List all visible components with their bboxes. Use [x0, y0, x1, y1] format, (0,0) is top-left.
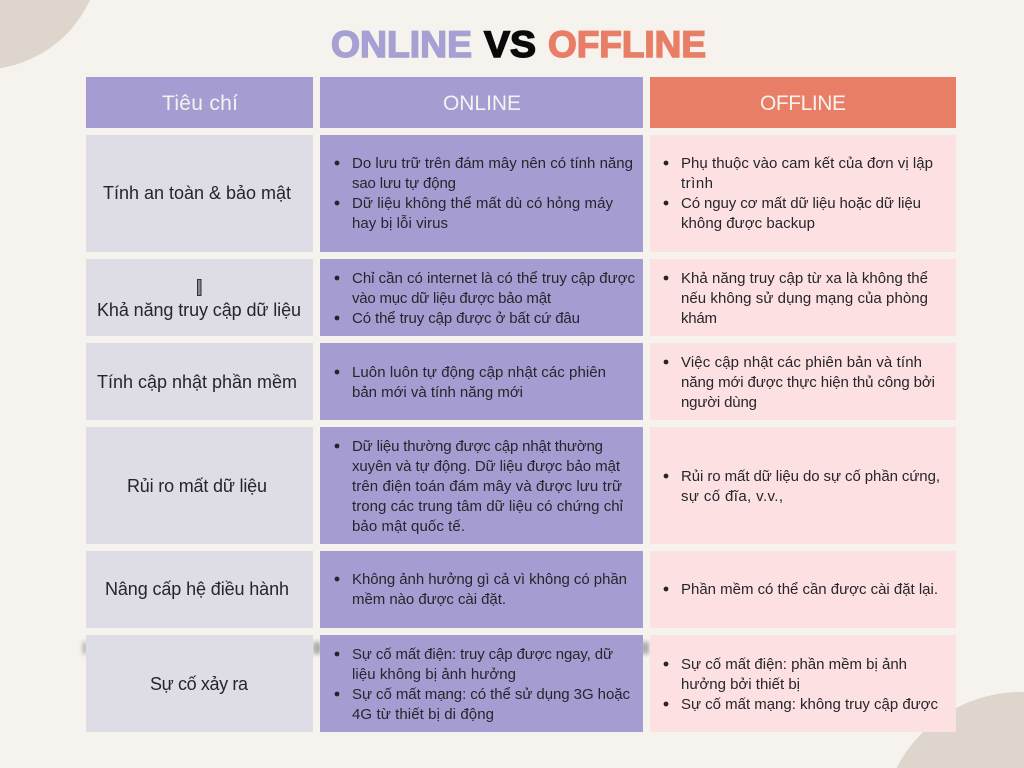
online: sự cố — [320, 635, 643, 732]
offline: nâng cấp: Phần mềm có thể cần được cài đặt lại. — [681, 581, 938, 598]
offline: sự cố: Sự cố mất điện: phần mềm bị ảnh — [681, 656, 907, 673]
offline: an toàn: Có nguy cơ mất dữ liệu hoặc dữ liệu — [681, 195, 921, 212]
criterion: Tính an toàn & bảo mật: Tính an toàn & bảo mật — [103, 183, 291, 203]
criterion: Nâng cấp hệ điều hành — [86, 551, 313, 628]
online: truy cập: vào mục dữ liệu được bảo mật — [352, 290, 552, 307]
criterion: Tính cập nhật phần mềm: Tính cập nhật phần mềm — [97, 372, 297, 392]
online: nâng cấp: Không ảnh hưởng gì cả vì không có phần — [352, 571, 627, 588]
online: rủi ro: trong các trung tâm dữ liệu có chứng chỉ — [352, 498, 624, 515]
title — [331, 24, 706, 65]
offline: sự cố: Sự cố mất mạng: không truy cập được — [681, 696, 938, 713]
offline: truy cập: nếu không sử dụng mạng của phòng — [681, 290, 928, 307]
online: an toàn — [320, 135, 643, 252]
offline: an toàn: Phụ thuộc vào cam kết của đơn vị lập — [681, 155, 933, 172]
criterion: Rủi ro mất dữ liệu — [86, 427, 313, 544]
blurred smudges — [83, 642, 649, 654]
online: rủi ro: xuyên và tự động. Dữ liệu được bảo mật — [352, 458, 621, 475]
offline: nâng cấp — [650, 551, 956, 628]
criterion: Tính cập nhật phần mềm — [86, 343, 313, 420]
online: cập nhật — [320, 343, 643, 420]
offline: cập nhật: năng mới được thực hiện thủ công bởi — [681, 374, 935, 391]
header: Tiêu chí: Tiêu chí — [162, 92, 238, 115]
online: sự cố: Sự cố mất điện: truy cập được ngay, dữ — [352, 646, 613, 663]
offline: rủi ro — [650, 427, 956, 544]
header: ONLINE: ONLINE — [443, 92, 521, 115]
offline: an toàn — [650, 135, 956, 252]
offline: truy cập: Khả năng truy cập từ xa là không thể — [681, 270, 928, 287]
offline: truy cập: khám — [681, 310, 717, 327]
online: an toàn: Dữ liệu không thể mất dù có hỏng máy — [352, 195, 614, 212]
header: ONLINE — [320, 77, 643, 128]
offline: cập nhật — [650, 343, 956, 420]
header: OFFLINE — [650, 77, 956, 128]
offline: rủi ro: Rủi ro mất dữ liệu do sự cố phần cứng, — [681, 468, 940, 485]
online: rủi ro — [320, 427, 643, 544]
offline: an toàn: trình — [681, 175, 713, 192]
online: rủi ro: Dữ liệu thường được cập nhật thường — [352, 438, 603, 455]
criterion: Tính an toàn & bảo mật — [86, 135, 313, 252]
online: sự cố: Sự cố mất mạng: có thể sử dụng 3G hoặc — [352, 686, 630, 703]
online: nâng cấp: mềm nào được cài đặt. — [352, 591, 506, 608]
offline: sự cố — [650, 635, 956, 732]
title: ONLINE — [331, 24, 472, 65]
online: cập nhật: Luôn luôn tự động cập nhật các phiên — [352, 364, 606, 381]
decorative circle: bottom right — [896, 692, 1024, 768]
criterion: Nâng cấp hệ điều hành: Nâng cấp hệ điều hành — [105, 579, 289, 599]
criterion: Khả năng truy cập dữ liệu: Khả năng truy cập dữ liệu — [97, 300, 301, 320]
offline: truy cập — [650, 259, 956, 336]
offline: sự cố: hưởng bởi thiết bị — [681, 676, 800, 693]
decorative circle: top left — [0, 0, 90, 68]
online: cập nhật: bản mới và tính năng mới — [352, 384, 523, 401]
online: truy cập: Chỉ cần có internet là có thể truy cập được — [352, 270, 636, 287]
offline: cập nhật: Việc cập nhật các phiên bản và tính — [681, 354, 922, 371]
header: Tiêu chí — [86, 77, 313, 128]
header: OFFLINE: OFFLINE — [760, 92, 846, 115]
online: an toàn: hay bị lỗi virus — [352, 215, 448, 232]
online: sự cố: 4G từ thiết bị di động — [352, 706, 494, 723]
offline: cập nhật: người dùng — [681, 394, 757, 411]
criterion: Sự cố xảy ra — [86, 635, 313, 732]
online: truy cập — [320, 259, 643, 336]
online: rủi ro: trên điện toán đám mây và được lưu trữ — [352, 478, 622, 495]
online: an toàn: sao lưu tự động — [352, 175, 456, 192]
offline: an toàn: không được backup — [681, 215, 815, 232]
online: nâng cấp — [320, 551, 643, 628]
title: VS — [484, 24, 536, 65]
online: truy cập: Có thể truy cập được ở bất cứ đâu — [352, 310, 580, 327]
online: rủi ro: bảo mật quốc tế. — [352, 518, 465, 535]
online: sự cố: liệu không bị ảnh hưởng — [352, 666, 516, 683]
title: OFFLINE — [548, 24, 706, 65]
offline: rủi ro: sự cố đĩa, v.v., — [681, 488, 783, 505]
criterion: Khả năng truy cập dữ liệu — [86, 259, 313, 336]
criterion: Rủi ro mất dữ liệu: Rủi ro mất dữ liệu — [127, 476, 267, 496]
online: an toàn: Do lưu trữ trên đám mây nên có tính năng — [352, 155, 633, 172]
criterion: Sự cố xảy ra: Sự cố xảy ra — [150, 674, 249, 694]
